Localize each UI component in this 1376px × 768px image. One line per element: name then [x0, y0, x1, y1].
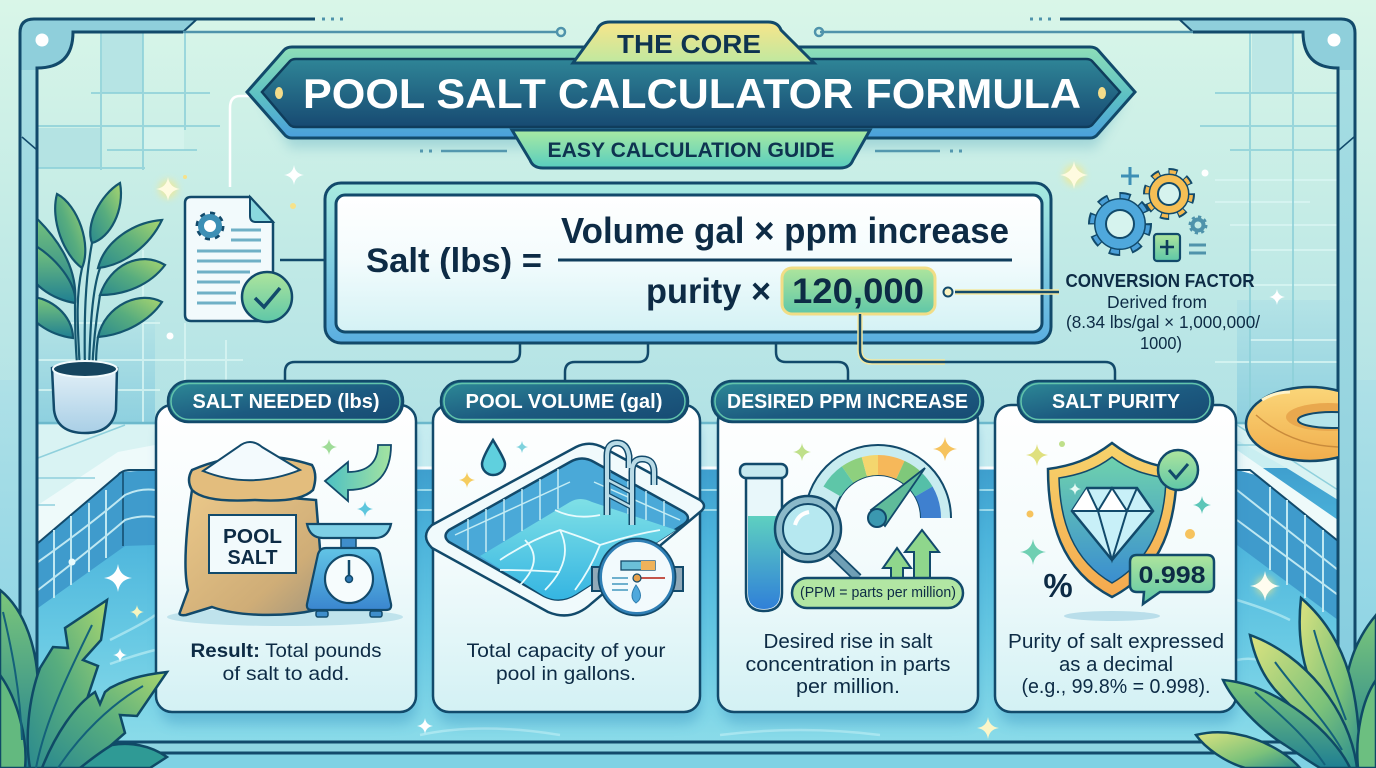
right deck and tile wall: [1237, 425, 1338, 500]
small gear: [1191, 218, 1205, 232]
description: Result: Total pounds: [190, 640, 382, 662]
panel: desired ppm increase: [712, 381, 983, 712]
highlighted factor 120,000: 120,000: [792, 272, 924, 311]
heading pill: DESIRED PPM INCREASE: [727, 391, 968, 413]
card body: [995, 405, 1236, 712]
ppm note pill: (PPM = parts per million): [800, 585, 956, 601]
description: Total capacity of your: [466, 640, 666, 662]
heading pill: POOL VOLUME (gal): [466, 391, 662, 413]
conversion factor callout text: [1066, 271, 1260, 353]
heading pill: SALT PURITY: [1052, 391, 1181, 413]
icon: potted plant: [20, 183, 165, 433]
main banner plate: POOL SALT CALCULATOR FORMULA: [303, 70, 1081, 117]
sparkles: [104, 161, 1285, 739]
icon: salt sack and scale: [167, 439, 403, 626]
conversion factor callout text: 1000): [1140, 333, 1182, 353]
icon: test tube, gauge, magnifier: [740, 437, 963, 611]
description: of salt to add.: [222, 663, 350, 685]
card shadows: [160, 420, 1236, 724]
description: [1008, 631, 1224, 698]
bottom tab: EASY CALCULATION GUIDE: [548, 139, 834, 162]
icon: inflatable ring: [1244, 386, 1338, 462]
description: pool in gallons.: [496, 663, 636, 685]
conversion factor callout text: (8.34 lbs/gal × 1,000,000/: [1066, 312, 1260, 332]
plus tile: [1154, 234, 1180, 261]
foreground leaves right: [1196, 598, 1376, 768]
connector lines: [285, 343, 1115, 390]
icon: shield with diamond: [1020, 441, 1214, 621]
panel: pool volume: [426, 381, 704, 712]
heading pill: [168, 381, 403, 422]
formula panel: [325, 183, 1051, 343]
conversion factor callout text: Derived from: [1107, 292, 1207, 312]
description: [746, 631, 950, 698]
panel: salt purity: [995, 381, 1236, 712]
icon: salt sack and scale: SALT: [228, 547, 278, 569]
ppm note pill: [792, 578, 963, 608]
value bubble 0.998: [1130, 555, 1214, 604]
description: [190, 640, 382, 685]
description: as a decimal: [1059, 654, 1173, 676]
numerator: Volume gal × ppm increase: [561, 210, 1009, 251]
description: Desired rise in salt: [764, 631, 933, 653]
heading pill: [1018, 381, 1213, 422]
panel: salt needed: [156, 381, 416, 712]
foreground leaves left: [0, 590, 167, 768]
description: concentration in parts: [746, 654, 950, 676]
bottom tab: [512, 130, 870, 168]
icon: document with check: [185, 197, 325, 322]
percent sign: %: [1043, 567, 1073, 604]
orange gear: [1149, 174, 1189, 214]
card body: [433, 405, 700, 712]
description: per million.: [796, 676, 900, 698]
description: Purity of salt expressed: [1008, 631, 1224, 653]
conversion factor callout text: CONVERSION FACTOR: [1066, 271, 1255, 291]
heading pill: [441, 381, 688, 422]
icon: gears: [1095, 167, 1206, 261]
description: [466, 640, 666, 685]
blue gear: [1095, 199, 1145, 249]
card body: [156, 405, 416, 712]
denominator: purity ×: [646, 272, 771, 311]
heading pill: [712, 381, 983, 422]
top tab: [573, 22, 814, 63]
top tab: THE CORE: [617, 29, 761, 59]
heading pill: SALT NEEDED (lbs): [192, 391, 380, 413]
main banner plate: [247, 47, 1135, 138]
callout connectors from factor: [860, 288, 1059, 362]
formula left side: Salt (lbs) =: [366, 242, 542, 280]
banner shadow: [262, 100, 1125, 148]
description: (e.g., 99.8% = 0.998).: [1022, 676, 1210, 698]
value bubble 0.998: 0.998: [1138, 562, 1206, 589]
icon: salt sack and scale: POOL: [223, 526, 282, 548]
banner title: [247, 22, 1135, 168]
left deck and tile wall: [38, 425, 155, 505]
icon: pool with meter: [426, 440, 704, 616]
card body: [718, 405, 978, 712]
